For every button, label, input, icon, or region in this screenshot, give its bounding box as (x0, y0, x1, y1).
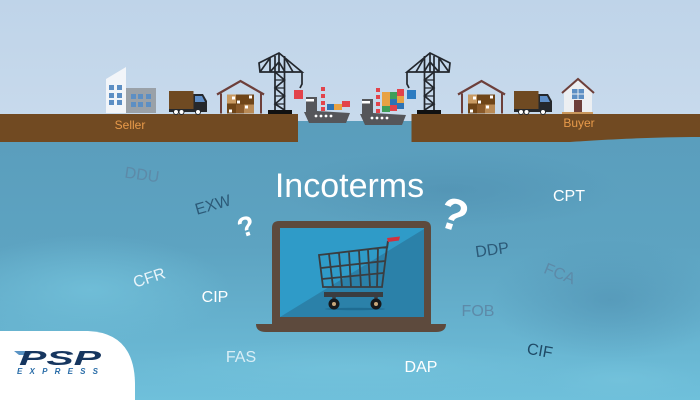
term: FCA: FCA (541, 261, 578, 288)
term: DDU: DDU (124, 165, 160, 186)
logo panel (0, 331, 135, 400)
term: CPT: CPT (553, 188, 585, 205)
seller land (0, 114, 298, 142)
term: CIF: CIF (526, 341, 554, 362)
logo: PSP Express: PSP (19, 348, 102, 370)
seller label: Seller (115, 118, 145, 132)
icon: seller warehouse (217, 81, 264, 114)
icon: buyer truck (514, 91, 552, 114)
buyer land (412, 114, 700, 142)
term: CIP: CIP (202, 289, 228, 306)
logo: PSP Express: EXPRESS (17, 367, 99, 376)
term: DDP: DDP (474, 240, 510, 261)
icon: buyer crane (407, 53, 450, 114)
icon: buyer warehouse (458, 81, 505, 114)
sea background (0, 121, 700, 400)
term: FOB: FOB (462, 303, 494, 320)
term labels (124, 165, 585, 376)
logo: PSP Express (14, 348, 102, 376)
title: Incoterms (275, 167, 424, 205)
buyer label: Buyer (563, 116, 595, 130)
icon: seller truck (169, 91, 207, 114)
icon: seller office buildings (106, 67, 156, 113)
question mark left: ? (233, 209, 259, 244)
icon: seller ship (304, 87, 350, 123)
question mark right: ? (433, 186, 475, 243)
sky background (0, 0, 700, 122)
icon: buyer house (562, 79, 594, 114)
shopping cart (319, 236, 400, 310)
icon: seller crane (259, 53, 303, 114)
term: CFR: CFR (131, 265, 168, 292)
term: DAP: DAP (405, 359, 437, 376)
icon: laptop with shopping cart (256, 221, 446, 332)
term: FAS: FAS (226, 349, 256, 366)
term: EXW: EXW (193, 192, 234, 219)
icon: buyer ship (360, 88, 406, 125)
